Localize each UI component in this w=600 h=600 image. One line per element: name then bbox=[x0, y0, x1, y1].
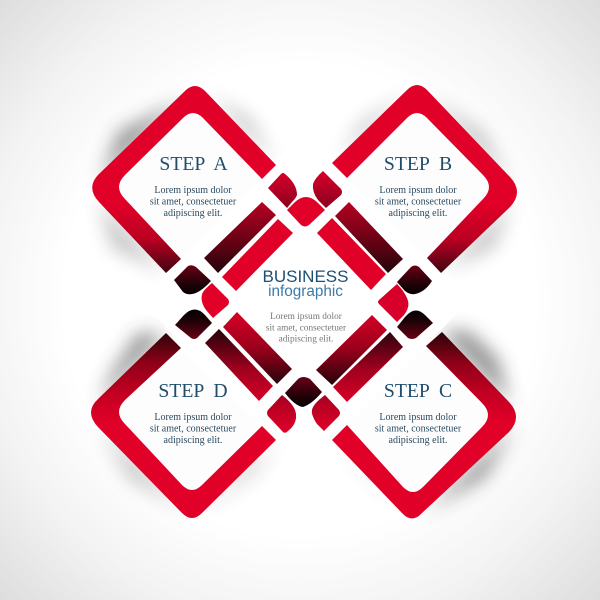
step B heading: STEP B bbox=[384, 153, 452, 175]
leaf: top left bbox=[268, 173, 297, 208]
panel: step D bbox=[91, 333, 276, 518]
step A frame bbox=[92, 86, 276, 273]
leaf: right upper dark bbox=[397, 266, 432, 294]
centre text: Lorem ipsum dolor bbox=[270, 312, 343, 322]
centre title bbox=[263, 267, 348, 345]
central white flap bbox=[140, 130, 470, 470]
leaf: top right bbox=[313, 171, 342, 208]
heading: business: BUSINESS bbox=[263, 267, 348, 286]
step C text: Lorem ipsum dolor bbox=[379, 412, 457, 423]
bar: upper left red bbox=[222, 219, 293, 291]
step B text: Lorem ipsum dolor bbox=[379, 185, 457, 196]
leaf: bottom left bbox=[267, 395, 296, 433]
step C frame bbox=[332, 332, 516, 518]
leaf cluster: bottom bbox=[267, 377, 340, 433]
step C text: sit amet, consectetuer bbox=[375, 423, 462, 434]
leaf: bottom right bbox=[312, 395, 340, 431]
leaf: right lower dark bbox=[397, 310, 433, 339]
step B card bbox=[347, 108, 495, 258]
step B text: adipiscing elit. bbox=[389, 208, 447, 219]
step D heading: STEP D bbox=[158, 380, 228, 402]
soft frame shadows bbox=[98, 92, 512, 512]
step B text: sit amet, consectetuer bbox=[375, 196, 462, 207]
step C heading: STEP C bbox=[384, 380, 452, 402]
panel: step B bbox=[332, 85, 517, 273]
bar: lower right outer bbox=[333, 332, 403, 402]
subheading: infographic: infographic bbox=[268, 283, 343, 300]
bar: upper left dark bbox=[204, 202, 276, 273]
step D frame bbox=[91, 333, 276, 518]
leaf: right centre bbox=[378, 284, 408, 322]
leaf: left centre bbox=[202, 283, 229, 318]
centre text: adipiscing elit. bbox=[279, 335, 333, 345]
leaf: bottom centre dark bbox=[285, 377, 322, 407]
diagonal bars bbox=[204, 202, 403, 402]
step A heading: STEP A bbox=[159, 153, 228, 175]
leaf cluster: right bbox=[378, 266, 433, 339]
leaf: left lower dark bbox=[175, 310, 212, 339]
panel: step A bbox=[92, 86, 276, 273]
step C text: adipiscing elit. bbox=[389, 435, 447, 446]
strong frame shadows bbox=[98, 98, 515, 512]
step D text: sit amet, consectetuer bbox=[150, 423, 237, 434]
step D text: adipiscing elit. bbox=[164, 435, 222, 446]
leaf cluster: top bbox=[268, 171, 342, 226]
step C card bbox=[347, 346, 494, 497]
step B frame bbox=[332, 85, 517, 273]
leaf: top centre bbox=[287, 197, 325, 226]
bar: lower right inner bbox=[316, 315, 387, 385]
leaf cluster: left bbox=[174, 265, 229, 339]
bar: lower left outer bbox=[205, 329, 273, 401]
bar: upper right dark bbox=[335, 202, 403, 273]
centre text: sit amet, consectetuer bbox=[266, 323, 347, 333]
step D card bbox=[113, 348, 262, 495]
bar: upper right red bbox=[317, 218, 386, 290]
step A text: sit amet, consectetuer bbox=[150, 196, 237, 207]
step A card bbox=[113, 108, 262, 259]
step D text: Lorem ipsum dolor bbox=[154, 412, 232, 423]
step A text: Lorem ipsum dolor bbox=[154, 185, 232, 196]
bar: lower left inner bbox=[223, 312, 292, 384]
leaf: left upper dark bbox=[174, 265, 211, 294]
panel: step C bbox=[332, 332, 516, 518]
step A text: adipiscing elit. bbox=[164, 208, 222, 219]
